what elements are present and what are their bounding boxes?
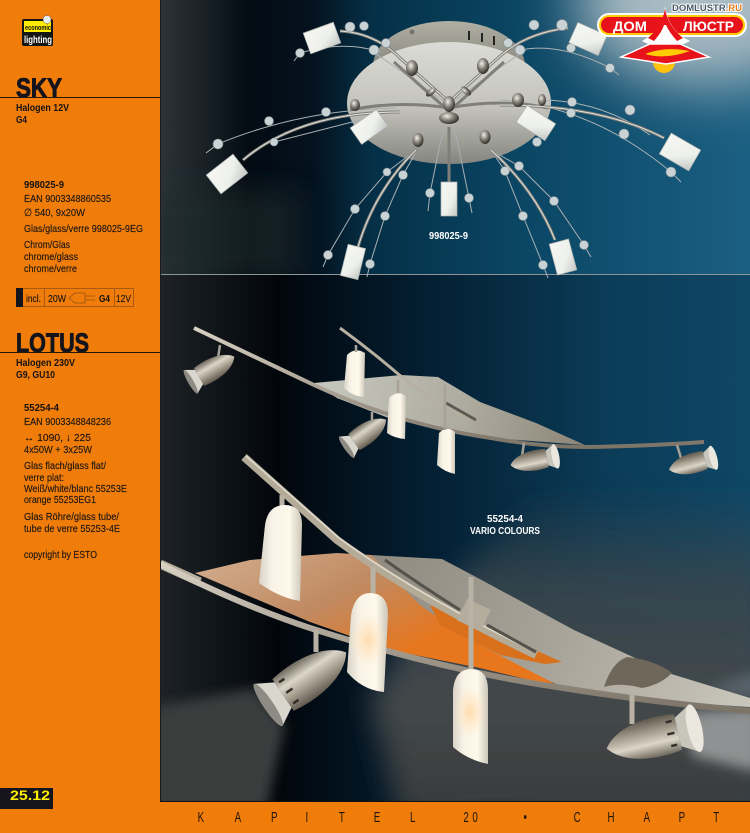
silver plate — [371, 555, 750, 707]
spotlight 1 — [182, 345, 241, 395]
stems — [282, 495, 632, 724]
LOTUS product data: 4x50W + 3x25W — [24, 444, 92, 456]
logo pill — [597, 13, 747, 37]
spec strip: incl. 20W G4 12V: G4 — [99, 293, 110, 305]
chrome joints — [350, 58, 546, 147]
spotlight 2 — [337, 409, 393, 459]
glow in lamp 2 — [356, 618, 380, 662]
rule: LOTUS — [0, 352, 160, 353]
caption: 55254-4 VARIO COLOURS: 55254-4 — [487, 513, 523, 525]
lamp LOTUS small view — [182, 328, 720, 482]
LOTUS product data: 55254-4 — [24, 402, 59, 414]
SKY product data: 998025-9 — [24, 179, 64, 191]
ceiling plate front — [347, 42, 551, 164]
wires — [206, 46, 681, 278]
lamp LOTUS large view — [160, 456, 750, 772]
rule: SKY — [0, 97, 160, 98]
footer: KAPITEL 20 CHAPT: KAPITEL 20 • CHAPT — [198, 809, 719, 826]
ceiling plate back — [373, 21, 525, 111]
LOTUS product data: ↔ 1090, ↓ 225 — [24, 432, 91, 444]
LOTUS subtitle: G9, GU10 — [16, 369, 55, 381]
spotlight 3 — [508, 443, 562, 477]
LOTUS product data: tube de verre 55253-4E — [24, 523, 120, 535]
rail front — [194, 328, 704, 447]
SKY subtitle — [16, 102, 69, 126]
tube lamp 2 — [387, 393, 406, 439]
LOTUS subtitle — [16, 357, 75, 381]
arms — [243, 28, 664, 247]
big tube lamp 3 — [453, 669, 488, 764]
glass plate — [314, 375, 585, 445]
bar slot — [446, 403, 476, 420]
logo lamp shade — [621, 44, 709, 64]
SKY product data: Chrom/Glas — [24, 239, 70, 251]
logo word: ДОМ: ДОМ — [613, 18, 647, 34]
front rail — [160, 564, 750, 711]
logo shade highlight — [645, 49, 690, 56]
logo word: ЛЮСТР: ЛЮСТР — [683, 18, 734, 34]
caption: 55254-4 VARIO COLOURS — [470, 513, 540, 537]
SKY product data — [24, 179, 143, 275]
bottom edge of photo — [160, 801, 750, 802]
heading: SKY: SKY — [16, 73, 62, 103]
arm highlights — [243, 28, 664, 247]
LOTUS subtitle: Halogen 230V — [16, 357, 75, 369]
SKY product data: ∅ 540, 9x20W — [24, 207, 85, 219]
panel: top photo background — [160, 0, 750, 280]
LOTUS product data: orange 55253EG1 — [24, 494, 96, 506]
plate reflection — [604, 657, 672, 688]
big tube lamp 2 — [347, 593, 388, 692]
rail back — [340, 328, 476, 420]
SKY product data: chrome/verre — [24, 263, 77, 275]
orange glass slit — [430, 605, 562, 664]
SKY subtitle: Halogen 12V — [16, 102, 69, 114]
spec strip: incl. 20W G4 12V: incl. — [26, 293, 41, 305]
caption: 998025-9: 998025-9 — [429, 230, 468, 242]
divider between photos — [161, 274, 750, 275]
badge: economic lighting: lighting — [24, 35, 52, 46]
heading: LOTUS: LOTUS — [16, 328, 89, 358]
rail highlight — [246, 456, 536, 652]
badge: economic lighting: economic — [25, 23, 51, 32]
LOTUS product data — [24, 402, 127, 535]
top rail — [244, 457, 536, 655]
spotlight 4 — [666, 445, 720, 482]
LOTUS product data: Glas Röhre/glass tube/ — [24, 511, 119, 523]
tube lamp 1 — [344, 350, 365, 397]
LOTUS product data: EAN 9003348848236 — [24, 416, 111, 428]
glow in lamp 3 — [459, 692, 482, 732]
copyright: copyright by ESTO — [24, 549, 97, 561]
LOTUS product data: verre plat: — [24, 472, 64, 484]
panel: bottom photo background — [150, 275, 750, 820]
crystal beads — [213, 20, 676, 270]
badge: economic lighting — [22, 16, 53, 46]
stems — [218, 345, 681, 458]
big tube lamp 1 — [259, 505, 302, 601]
page number badge: 25.12 — [10, 787, 50, 803]
spec strip: incl. 20W G4 12V: 20W — [48, 293, 66, 305]
thick left rail end — [160, 564, 200, 582]
SKY product data: Glas/glass/verre 998025-9EG — [24, 223, 143, 235]
page number badge — [0, 787, 53, 809]
slots on plate — [410, 30, 495, 45]
tube lamp 3 — [437, 429, 455, 474]
logo lamp bulb — [653, 51, 675, 73]
orange glass plate — [195, 553, 563, 688]
logo: Dom Lustr — [597, 3, 747, 73]
spec strip: incl. 20W G4 12V — [16, 288, 134, 307]
logo tower arch — [648, 9, 683, 41]
LOTUS product data: Weiß/white/blanc 55253E — [24, 483, 127, 495]
spec strip: incl. 20W G4 12V: 12V — [116, 293, 131, 305]
logo url: DOMLUSTR.RU — [672, 3, 742, 14]
SKY product data: EAN 9003348860535 — [24, 193, 111, 205]
chandelier SKY 998025-9 — [206, 20, 701, 280]
LOTUS product data: Glas flach/glass flat/ — [24, 460, 106, 472]
big spotlight 2 — [606, 704, 704, 759]
glass cubes — [206, 22, 701, 280]
logo lamp tower — [642, 6, 690, 44]
SKY product data: chrome/glass — [24, 251, 78, 263]
big spotlight 1 — [253, 650, 346, 726]
SKY subtitle: G4 — [16, 114, 27, 126]
connector block — [457, 598, 491, 626]
caption: 55254-4 VARIO COLOURS: VARIO COLOURS — [470, 525, 540, 537]
sidebar edge — [160, 0, 161, 802]
rail slot — [385, 560, 536, 652]
